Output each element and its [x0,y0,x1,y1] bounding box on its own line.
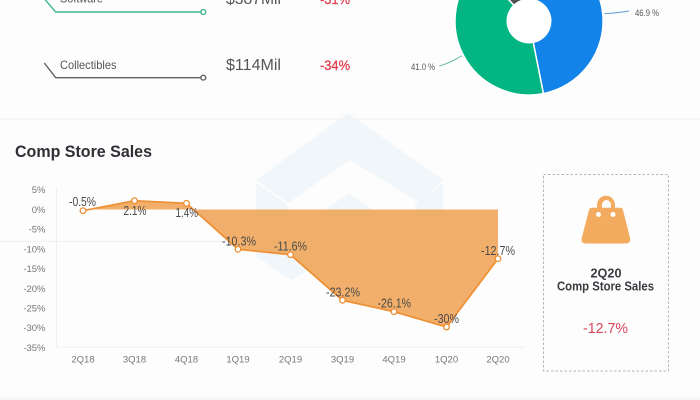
data labels [69,195,515,326]
icon: shopping bag [581,196,630,244]
data labels: -0.5% [69,195,96,209]
heading: Comp Store Sales: Comp Store Sales [15,142,152,161]
x axis labels: 4Q19 [382,354,406,366]
card title: Comp Store Sales [557,279,654,293]
x axis labels: 1Q20 [435,354,458,366]
y axis labels: -15% [23,264,46,275]
watermark logo [256,113,443,280]
line and area chart [0,185,524,366]
data labels: -30% [434,312,459,326]
data labels: -26.1% [378,296,411,310]
x axis labels: 4Q18 [175,354,198,366]
data labels: -23.2% [326,286,360,300]
card title: 2Q20 [590,267,622,281]
x axis labels: 2Q20 [486,354,510,366]
row: collectibles: -34% [320,57,350,73]
data labels: 2.1% [124,204,146,218]
data labels: -10.3% [222,234,256,248]
x axis labels: 2Q19 [279,354,302,366]
y axis labels: -5% [29,224,46,236]
card value: -12.7% [583,320,628,337]
data labels: 1.4% [176,206,198,220]
y axis labels: -10% [23,244,46,256]
panel: category table [44,0,350,80]
donut chart [411,0,659,95]
data labels: -12.7% [481,244,515,258]
data line [83,201,498,327]
row: software [44,0,350,14]
y axis labels [23,185,46,354]
panel: 2Q20 summary card [544,174,668,371]
x axis labels [71,354,510,366]
y axis labels: -35% [23,343,46,354]
x axis labels: 2Q18 [71,354,95,366]
donut chart: 41.0 % [411,62,435,72]
data labels: -11.6% [274,240,307,254]
y axis labels: -30% [23,323,46,334]
x axis labels: 3Q19 [331,354,354,366]
data points [80,198,501,330]
row: collectibles: $114Mil [226,57,281,74]
y axis labels: 5% [32,185,46,196]
row: collectibles: Collectibles [60,58,116,72]
y axis labels: -20% [23,284,46,295]
x axis labels: 1Q19 [226,354,250,366]
y axis labels: -25% [23,304,46,314]
y axis labels: 0% [32,205,46,216]
row: collectibles [44,57,350,80]
donut chart: 46.9 % [635,8,659,18]
x axis labels: 3Q18 [123,354,146,366]
area fill [83,201,498,327]
